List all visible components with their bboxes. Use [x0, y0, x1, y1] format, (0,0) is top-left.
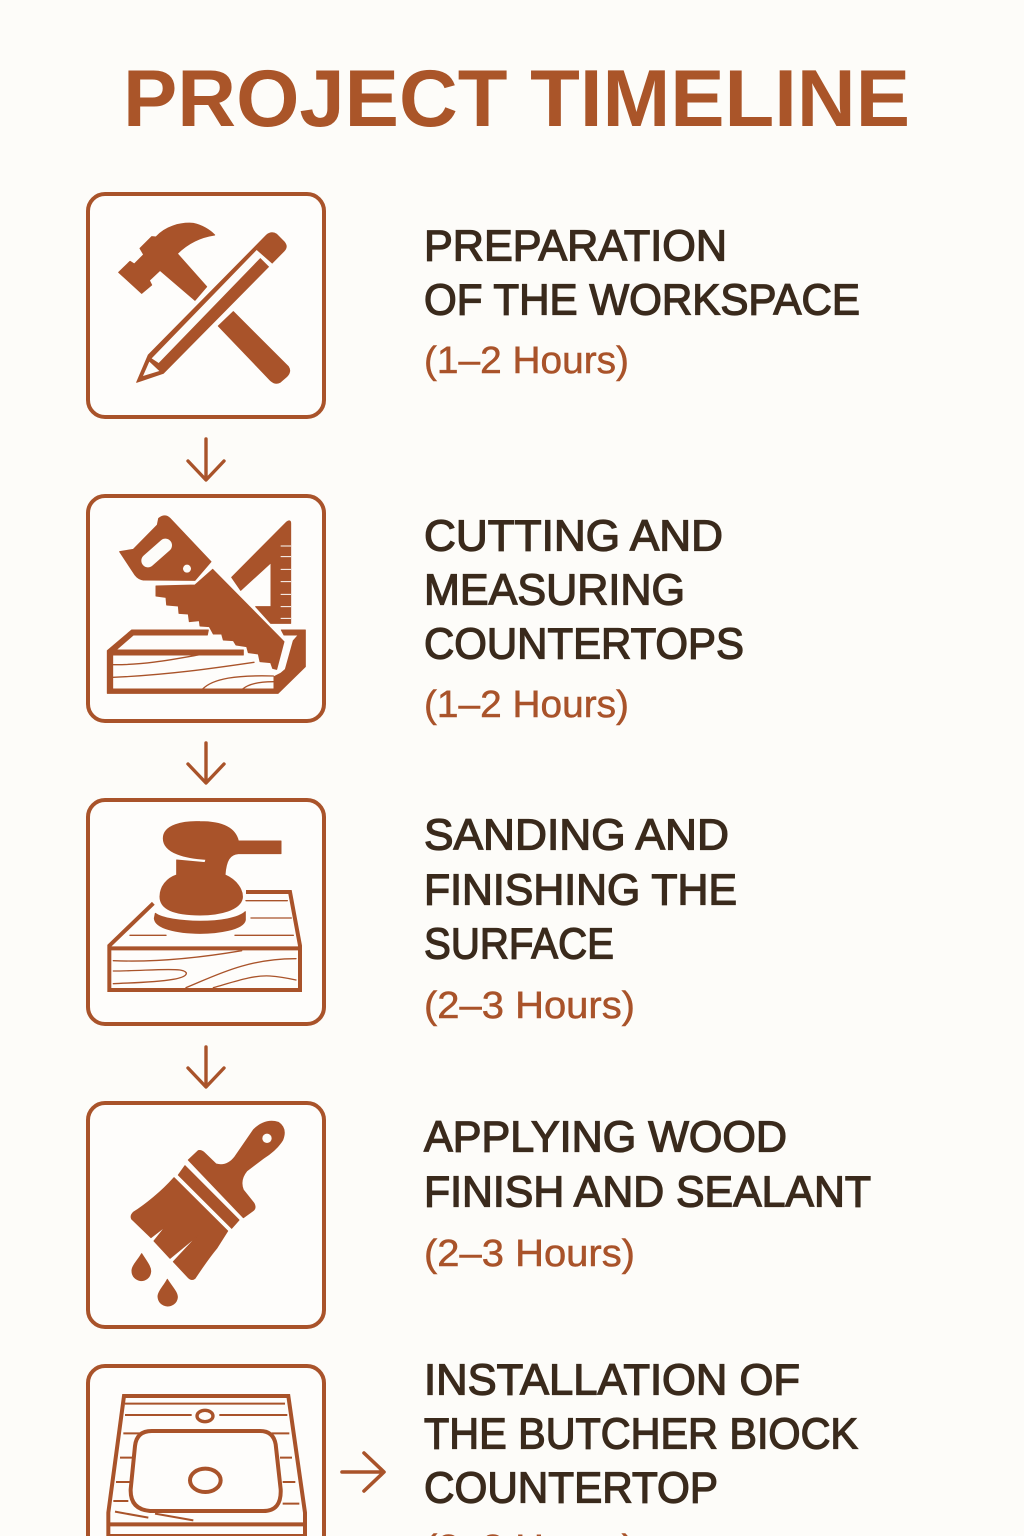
step 3 panel: sanding [88, 800, 737, 1027]
step 1 duration: (1–2 Hours) [424, 340, 629, 382]
icon: saw, square and board [107, 516, 305, 693]
step 2 duration: (1–2 Hours) [424, 684, 629, 726]
step 2 heading: CUTTING AND [424, 512, 723, 560]
icon frame: step 4 [88, 1103, 324, 1327]
arrow: step 1 to 2 [188, 439, 224, 480]
icon: hammer and pencil [119, 223, 290, 383]
icon frame: step 3 [88, 800, 324, 1024]
step 4 heading: APPLYING WOOD [424, 1112, 787, 1162]
step 1 heading: PREPARATION [424, 222, 727, 270]
step 5 heading: THE BUTCHER BIOCK [424, 1410, 858, 1458]
arrow: step 5 pointer [342, 1453, 384, 1491]
step 2 heading: MEASURING [424, 566, 685, 614]
step 2 heading [424, 512, 744, 668]
step 2 heading: COUNTERTOPS [424, 620, 744, 668]
step 4 panel: wood finish [88, 1103, 871, 1327]
icon frame: step 1 [88, 194, 324, 417]
icon: orbital sander on board [109, 822, 300, 990]
step 3 heading: SURFACE [424, 920, 614, 968]
step 1 panel: preparation [88, 194, 860, 417]
step 3 heading [424, 810, 737, 968]
step 5 heading: COUNTERTOP [424, 1464, 718, 1512]
step 1 heading [424, 222, 860, 324]
icon: paint brush with drops [131, 1121, 284, 1306]
arrow: step 2 to 3 [188, 743, 224, 783]
title: PROJECT TIMELINE [123, 54, 910, 144]
step 5 panel: installation [88, 1356, 858, 1536]
arrow: step 3 to 4 [188, 1047, 224, 1087]
step 3 heading: SANDING AND [424, 810, 729, 860]
step 5 heading: INSTALLATION OF [424, 1356, 800, 1404]
step 4 heading [424, 1112, 871, 1216]
step 3 duration: (2–3 Hours) [424, 985, 635, 1027]
step 4 heading: FINISH AND SEALANT [424, 1168, 871, 1216]
step 3 heading: FINISHING THE [424, 866, 737, 914]
step 1 heading: OF THE WORKSPACE [424, 276, 860, 324]
step 4 duration: (2–3 Hours) [424, 1233, 635, 1275]
icon: countertop with sink [108, 1396, 305, 1536]
step 5 heading [424, 1356, 858, 1512]
icon frame: step 5 [88, 1366, 324, 1536]
step 2 panel: cutting and measuring [88, 496, 744, 726]
icon frame: step 2 [88, 496, 324, 721]
